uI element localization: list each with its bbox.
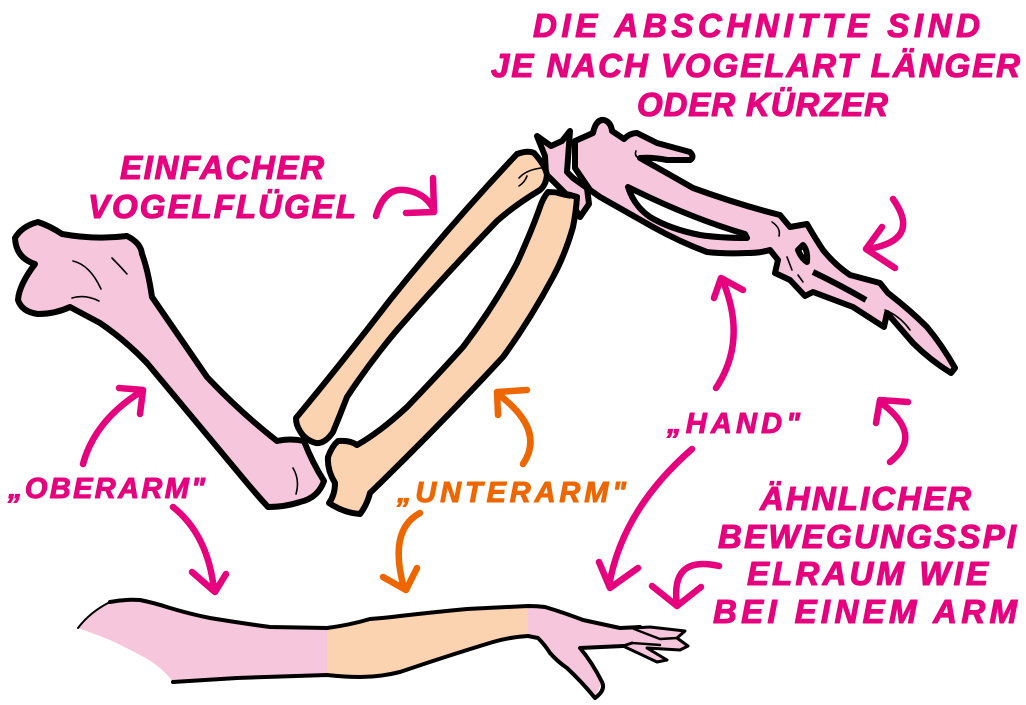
human arm illustration [78,600,688,698]
text block: Bewegungsspielraum note: ÄHNLICHER [759,480,971,517]
heading: top right note: ODER KÜRZER [637,86,888,123]
arm: forearm fill [327,606,528,677]
arrow: Hand to hand bones [714,278,743,388]
arrow: Unterarm to human forearm [383,513,420,590]
text block: Bewegungsspielraum note: ELRAUM WIE [747,555,989,592]
label: Hand: „HAND" [666,408,801,440]
arm: hand fill [528,606,688,698]
heading: top right note: JE NACH VOGELART LÄNGER [491,47,1020,84]
bone: carpal star between forearm and hand [537,131,589,217]
heading: Einfacher Vogelflügel: EINFACHER [120,149,324,186]
arrow: Oberarm to humerus [83,388,143,464]
bone: humerus (Oberarm) [15,222,324,507]
arrow: top note to digits [866,199,903,268]
text block: Bewegungsspielraum note [713,480,1018,630]
arrow: Einfacher Vogelflügel to ulna [376,178,434,216]
digit opening [798,245,807,262]
arrow: Unterarm to radius [497,390,530,464]
arrow: Oberarm to human upper arm [173,507,226,592]
heading: Einfacher Vogelflügel: VOGELFLÜGEL [88,188,356,225]
arm: upper arm fill [78,600,327,682]
bone: radius (Unterarm, lower) [328,192,577,514]
arrow: Hand to human hand [599,449,692,588]
text block: Bewegungsspielraum note: BEWEGUNGSSPI [718,518,1017,555]
arrow: Ähnlicher to digit tip [876,400,908,462]
hand bone opening [628,187,747,238]
text block: Bewegungsspielraum note: BEI EINEM ARM [713,593,1018,630]
bone: ulna (Unterarm, upper) [296,152,547,443]
label: Oberarm: „OBERARM" [7,473,206,505]
arrow: Ähnlicher to human hand [652,564,719,606]
heading: top right note [491,7,1020,123]
bone: hand (Handknochen) [575,120,955,373]
heading: Einfacher Vogelflügel [88,149,356,225]
heading: top right note: DIE ABSCHNITTE SIND [533,7,980,44]
label: Unterarm: „UNTERARM" [396,477,627,509]
arm: outline [78,600,688,698]
